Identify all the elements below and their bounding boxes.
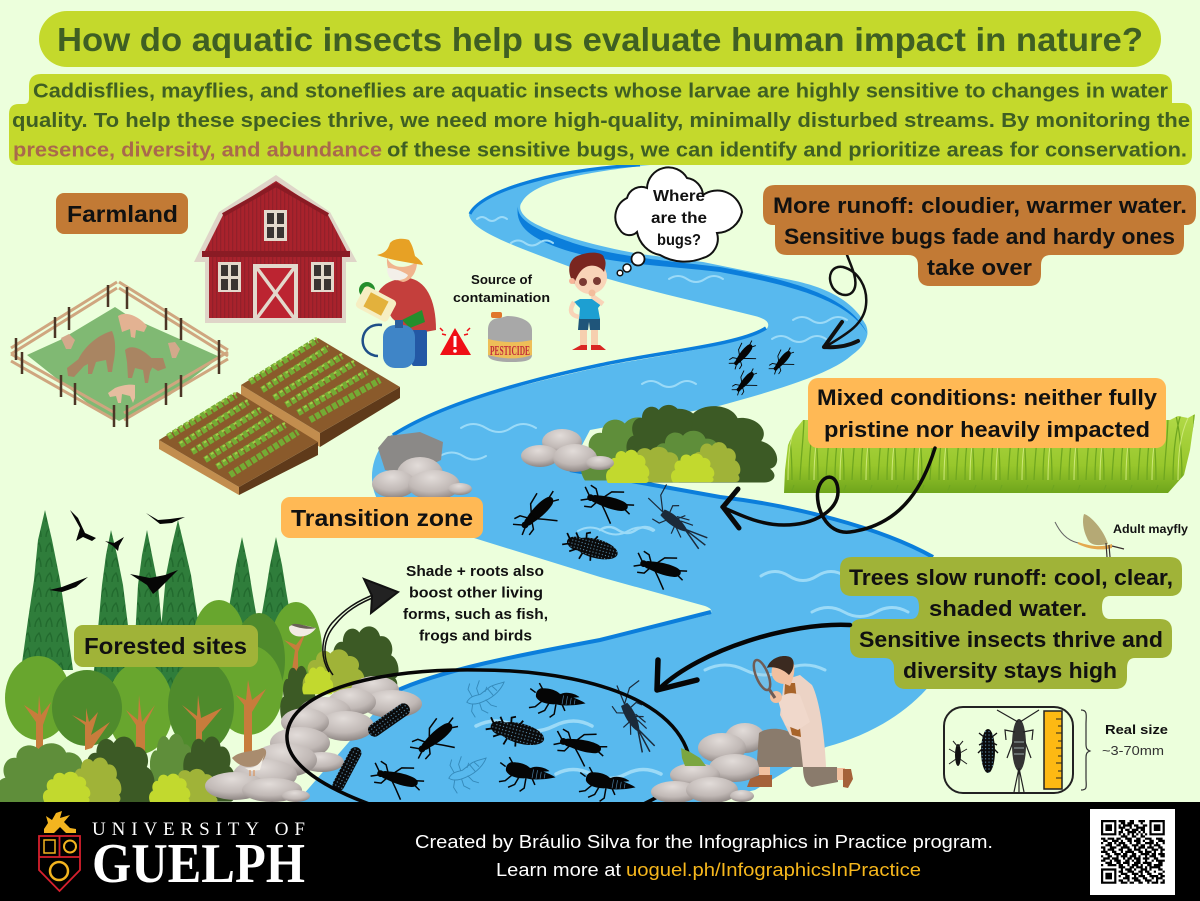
farmer with sprayer (354, 239, 436, 368)
real size text: Real size (1105, 722, 1168, 737)
rocks: forest bank (205, 676, 422, 802)
label: more runoff: Sensitive bugs fade and hardy ones (784, 224, 1175, 249)
label: more runoff: take over (927, 255, 1032, 280)
credit text (415, 832, 993, 880)
bird on rock (232, 748, 266, 776)
label: forested sites (74, 625, 258, 667)
title: How do aquatic insects help us evaluate human impact in nature? (57, 21, 1143, 58)
icon: pesticide jug: PESTICIDE (490, 344, 530, 359)
birds in flight (49, 510, 185, 594)
grass (784, 414, 1195, 493)
thought cloud: bugs? (657, 232, 701, 249)
insects: transition zone (509, 481, 720, 594)
river dark bank (470, 165, 640, 214)
arrow: runoff to stream (824, 255, 866, 347)
rocks: scientist (651, 723, 765, 803)
label: mixed conditions: pristine nor heavily impacted (824, 417, 1150, 442)
arrow: shade to text (323, 579, 398, 675)
brace (1081, 710, 1090, 790)
bushes: mid river (581, 405, 777, 483)
University of Guelph logo: UNIVERSITY OF (92, 819, 305, 840)
scientist with magnifier (747, 656, 853, 788)
bushes: forest floor (0, 734, 235, 804)
fence rails (11, 282, 228, 420)
rocks: mid river (372, 429, 614, 500)
icon: red barn (194, 175, 357, 323)
label: mixed conditions (808, 378, 1166, 448)
river (296, 165, 958, 803)
credit text: Created by Bráulio Silva for the Infographics in Practice program. (415, 832, 993, 852)
label: trees slow runoff (840, 557, 1182, 689)
intro paragraph: presence, diversity, and abundance (13, 140, 382, 162)
thought cloud (615, 167, 742, 276)
intro paragraph: of these sensitive bugs, we can identify and prioritize areas for conservation. (387, 140, 1187, 162)
forest conifers (21, 510, 292, 690)
credit text: Learn more at (496, 860, 621, 880)
text: shade and roots: boost other living (409, 586, 543, 602)
intro paragraph (9, 74, 1192, 165)
title (39, 11, 1161, 67)
University of Guelph logo (39, 811, 305, 895)
icon: warning triangle (440, 328, 471, 355)
griffin (44, 811, 76, 833)
arrow: trees to stream (657, 625, 850, 690)
small insect (949, 741, 967, 766)
QR code (1090, 809, 1175, 895)
insects: upper stream (726, 337, 801, 401)
real size text: ~3-70mm (1102, 743, 1164, 758)
cows and pigs (61, 314, 180, 403)
text: shade and roots: frogs and birds (419, 628, 532, 644)
real size text (1102, 722, 1168, 758)
insects: forested stream (330, 673, 671, 807)
label: trees slow runoff: Sensitive insects thrive and (859, 627, 1163, 652)
real size box (944, 707, 1073, 794)
arrow: mixed conditions to stream (722, 448, 935, 532)
crop plots (159, 338, 400, 495)
thought cloud: are the (651, 210, 707, 227)
frog (681, 748, 706, 766)
ruler (1044, 711, 1062, 789)
intro paragraph: Caddisflies, mayflies, and stoneflies are aquatic insects whose larvae are highly sensitive to changes in water (33, 80, 1168, 102)
medium insect (978, 729, 998, 773)
label: more runoff: More runoff: cloudier, warmer water. (773, 193, 1187, 218)
thought cloud: Where (653, 188, 705, 205)
label: trees slow runoff: diversity stays high (903, 658, 1117, 683)
text: shade and roots (403, 564, 548, 644)
University of Guelph logo: GUELPH (92, 833, 305, 895)
shield (39, 836, 80, 891)
text: shade and roots: forms, such as fish, (403, 607, 548, 623)
icon: pesticide jug (488, 312, 532, 362)
forest broadleaf trees (5, 600, 399, 760)
intro paragraph: quality. To help these species thrive, we need more high-quality, minimally disturbed streams. By monitoring the (12, 110, 1190, 132)
boy (569, 253, 607, 350)
river waves (440, 217, 908, 778)
credit text: uoguel.ph/InfographicsInPractice (626, 860, 921, 880)
source of contamination: contamination (453, 290, 550, 305)
label: transition zone (281, 497, 483, 538)
label: mixed conditions: Mixed conditions: neither fully (817, 385, 1158, 410)
large insect (997, 710, 1039, 794)
highlight ellipse (287, 670, 690, 812)
label: more runoff (763, 185, 1196, 286)
source of contamination: Source of (471, 272, 533, 287)
footer (0, 802, 1200, 901)
label: trees slow runoff: shaded water. (929, 596, 1087, 621)
bird on branch (289, 624, 316, 637)
label: forested sites: Forested sites (84, 633, 247, 659)
text: shade and roots: Shade + roots also (406, 564, 544, 580)
caddis case (366, 701, 412, 739)
label: farmland: Farmland (67, 201, 178, 227)
icon: adult mayfly (1055, 514, 1124, 557)
adult mayfly label: Adult mayfly (1113, 524, 1189, 536)
label: farmland (56, 193, 188, 234)
label: trees slow runoff: Trees slow runoff: cool, clear, (849, 565, 1173, 590)
source of contamination (453, 272, 550, 305)
pasture with fence and animals (11, 282, 228, 427)
fence posts (16, 285, 219, 427)
caddis case (330, 745, 364, 793)
label: transition zone: Transition zone (291, 505, 473, 531)
